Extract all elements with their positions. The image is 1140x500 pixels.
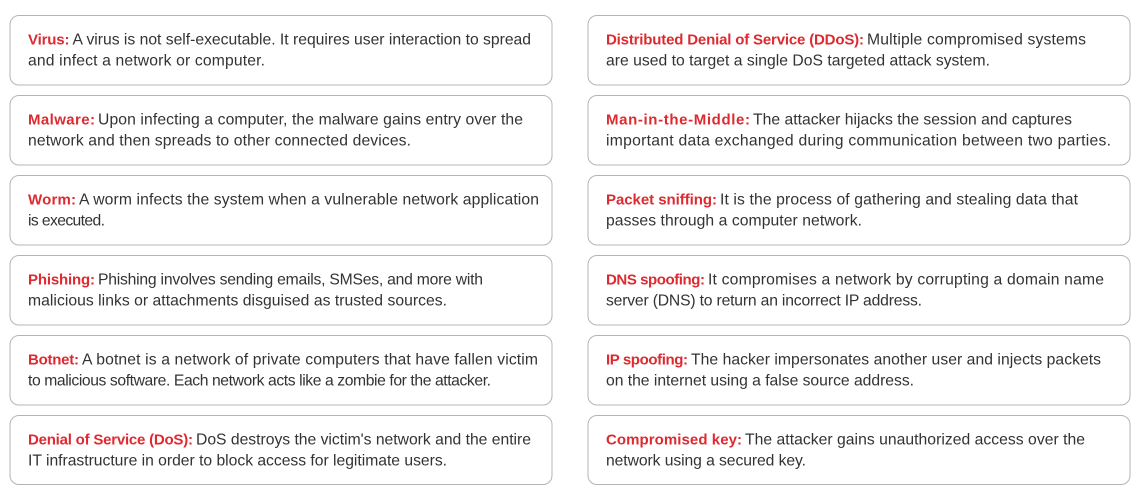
panel: Distributed Denial of Service: are used to target a single DoS targeted attack system. xyxy=(606,52,990,70)
panel: Botnet xyxy=(10,336,552,405)
panel: Compromised key: Compromised key: xyxy=(606,432,742,448)
panel: Distributed Denial of Service xyxy=(588,16,1130,85)
panel: Phishing: Phishing: xyxy=(28,272,95,288)
panel: DNS spoofing: It compromises a network by corrupting a domain name xyxy=(708,272,1104,288)
panel: Worm: Worm: xyxy=(28,192,76,208)
panel: Packet sniffing xyxy=(588,176,1130,245)
panel: Botnet: Botnet: xyxy=(28,352,79,368)
panel: Distributed Denial of Service: Multiple compromised systems xyxy=(867,32,1086,48)
panel: Phishing: Phishing involves sending emails, SMSes, and more with xyxy=(98,272,483,288)
panel: Denial of Service: DoS destroys the victim's network and the entire xyxy=(196,432,531,448)
panel: Man-in-the-Middle: Man-in-the-Middle: xyxy=(606,112,750,128)
panel: Virus: Virus: xyxy=(28,32,70,48)
panel: Malware: Malware: xyxy=(28,112,95,128)
panel: Compromised key xyxy=(588,416,1130,484)
panel: IP spoofing: IP spoofing: xyxy=(606,352,688,368)
panel: DNS spoofing xyxy=(588,256,1130,325)
panel: Virus: and infect a network or computer. xyxy=(28,52,265,70)
panel: Man-in-the-Middle: important data exchanged during communication between two parties. xyxy=(606,132,1111,150)
panel: Worm: is executed. xyxy=(28,212,105,230)
panel: DNS spoofing: DNS spoofing: xyxy=(606,272,705,288)
panel: Man-in-the-Middle: The attacker hijacks the session and captures xyxy=(753,112,1072,128)
panel: Virus xyxy=(10,16,552,85)
panel: Man-in-the-Middle xyxy=(588,96,1130,165)
panel: Distributed Denial of Service: Distributed Denial of Service (DDoS): xyxy=(606,32,864,48)
panel: Botnet: to malicious software. Each network acts like a zombie for the attacker. xyxy=(28,372,491,390)
panel: Compromised key: network using a secured key. xyxy=(606,452,806,470)
panel: Virus: A virus is not self-executable. It requires user interaction to spread xyxy=(72,32,531,48)
panel: Phishing: malicious links or attachments disguised as trusted sources. xyxy=(28,292,447,310)
panel: Denial of Service: Denial of Service (DoS): xyxy=(28,432,193,448)
panel: IP spoofing: on the internet using a false source address. xyxy=(606,372,914,390)
panel: Botnet: A botnet is a network of private computers that have fallen victim xyxy=(82,352,538,368)
panel: Worm: A worm infects the system when a vulnerable network application xyxy=(79,192,539,208)
panel: DNS spoofing: server (DNS) to return an incorrect IP address. xyxy=(606,292,922,310)
panel: Packet sniffing: It is the process of gathering and stealing data that xyxy=(720,192,1079,208)
panel: IP spoofing xyxy=(588,336,1130,405)
panel: Phishing xyxy=(10,256,552,325)
panel: Malware: Upon infecting a computer, the malware gains entry over the xyxy=(98,112,523,128)
panel: Worm xyxy=(10,176,552,245)
panel: Denial of Service xyxy=(10,416,552,484)
panel: Compromised key: The attacker gains unauthorized access over the xyxy=(745,432,1085,448)
panel: Packet sniffing: Packet sniffing: xyxy=(606,192,717,208)
panel: Malware xyxy=(10,96,552,165)
panel: Denial of Service: IT infrastructure in order to block access for legitimate users. xyxy=(28,452,447,470)
panel: Malware: network and then spreads to other connected devices. xyxy=(28,132,411,150)
panel: IP spoofing: The hacker impersonates another user and injects packets xyxy=(691,352,1101,368)
panel: Packet sniffing: passes through a computer network. xyxy=(606,212,862,230)
